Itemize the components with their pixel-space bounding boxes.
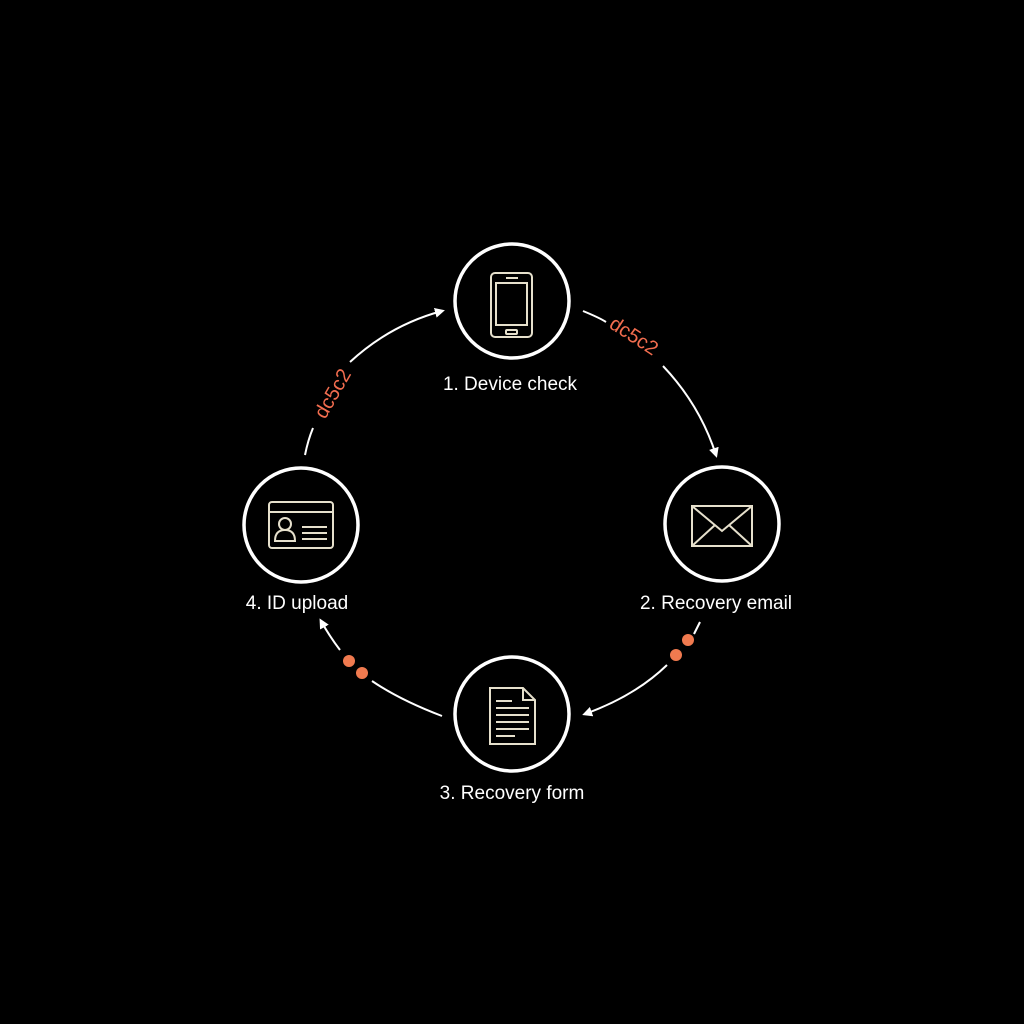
arrow: recovery form to ID upload xyxy=(321,621,442,716)
step 4: ID upload xyxy=(244,468,358,614)
icon: phone xyxy=(491,273,532,337)
step 2: recovery email: 2. Recovery email xyxy=(640,593,792,614)
arrow: device check to recovery email xyxy=(583,311,716,455)
arrow: ID upload to device check: dc5c2 xyxy=(310,365,356,422)
arrow: device check to recovery email: dc5c2 xyxy=(605,313,662,360)
arrow: recovery email to recovery form xyxy=(585,622,700,714)
icon: ID card xyxy=(269,502,333,548)
step 2: recovery email xyxy=(640,467,792,614)
arrow: ID upload to device check xyxy=(305,311,442,455)
step 3: recovery form xyxy=(440,657,584,804)
icon: envelope xyxy=(692,506,752,546)
step 1: device check: 1. Device check xyxy=(443,374,578,395)
icon: document xyxy=(490,688,535,744)
step 1: device check xyxy=(443,244,578,395)
step 3: recovery form: 3. Recovery form xyxy=(440,783,584,804)
step 4: ID upload: 4. ID upload xyxy=(246,593,348,614)
